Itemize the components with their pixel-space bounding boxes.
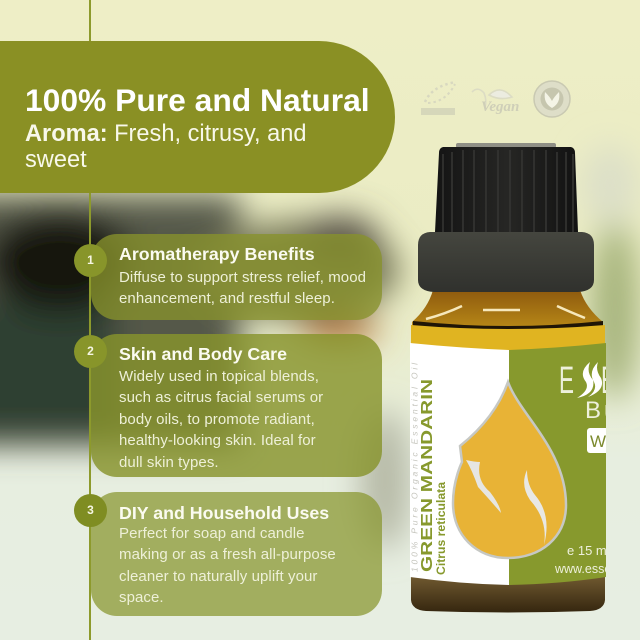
collar <box>418 232 594 292</box>
bottle <box>410 143 620 612</box>
label text: brand <box>555 362 606 573</box>
label text: brand: e 15 m <box>567 543 607 558</box>
text 3: space. <box>119 589 164 606</box>
cap <box>435 143 578 232</box>
number badge 3: 3 <box>87 503 94 517</box>
heading 2: Skin and Body Care <box>119 344 287 364</box>
dark band <box>413 321 603 330</box>
icon: vegan badge: Vegan <box>481 99 519 115</box>
heading: 100% Pure and Natural <box>25 82 370 118</box>
text 1: Diffuse to support stress relief, mood <box>119 269 366 286</box>
panel: aromatherapy benefits <box>91 234 382 320</box>
text 2 <box>119 368 323 471</box>
label text: product name: 100% Pure Organic Essential Oil <box>410 362 420 572</box>
label text: product name: Citrus reticulata <box>436 481 448 575</box>
label text: brand: E <box>559 360 574 402</box>
label text: product name: GREEN MANDARIN <box>419 379 436 572</box>
panel: skin and body care <box>91 334 382 477</box>
bottle base <box>411 570 605 612</box>
heading 1: Aromatherapy Benefits <box>119 244 315 264</box>
text 2: Widely used in topical blends, <box>119 368 319 385</box>
label text: brand: Wo <box>590 432 615 451</box>
yellow band <box>411 325 605 352</box>
text 3: cleaner to naturally uplift your <box>119 568 318 585</box>
aroma text: sweet <box>25 147 87 173</box>
number badge 2: 2 <box>87 344 94 358</box>
icon: cruelty free badge <box>534 81 570 117</box>
number badge 3 <box>74 494 107 527</box>
label green <box>509 343 606 585</box>
icon: vegan badge <box>472 89 519 115</box>
number badge 1 <box>74 244 107 277</box>
label white <box>410 343 509 585</box>
number badge 1: 1 <box>87 253 94 267</box>
panel: DIY and household uses <box>91 492 382 616</box>
text 3: Perfect for soap and candle <box>119 525 305 542</box>
bottle and badges <box>410 80 606 612</box>
text 3: making or as a fresh all-purpose <box>119 546 336 563</box>
text 1 <box>119 269 366 307</box>
label text: product name <box>410 362 448 575</box>
panel: header <box>0 41 395 193</box>
text 2: dull skin types. <box>119 454 219 471</box>
vertical timeline line <box>89 0 91 640</box>
label text: brand: E <box>601 360 616 402</box>
drop <box>453 382 566 558</box>
aroma text: Aroma: Fresh, citrusy, and <box>25 121 306 147</box>
text 2: body oils, to promote radiant, <box>119 411 315 428</box>
text 1: enhancement, and restful sleep. <box>119 290 335 307</box>
text 3 <box>119 525 336 606</box>
number badge 2 <box>74 335 107 368</box>
label text: brand: www.essen <box>554 562 618 576</box>
text 2: healthy-looking skin. Ideal for <box>119 432 316 449</box>
aroma text <box>25 121 306 173</box>
glass neck <box>412 290 603 330</box>
heading 3: DIY and Household Uses <box>119 503 329 523</box>
icon: organic leaf badge <box>421 82 456 115</box>
label text: brand: Bu <box>585 397 620 424</box>
text 2: such as citrus facial serums or <box>119 389 323 406</box>
